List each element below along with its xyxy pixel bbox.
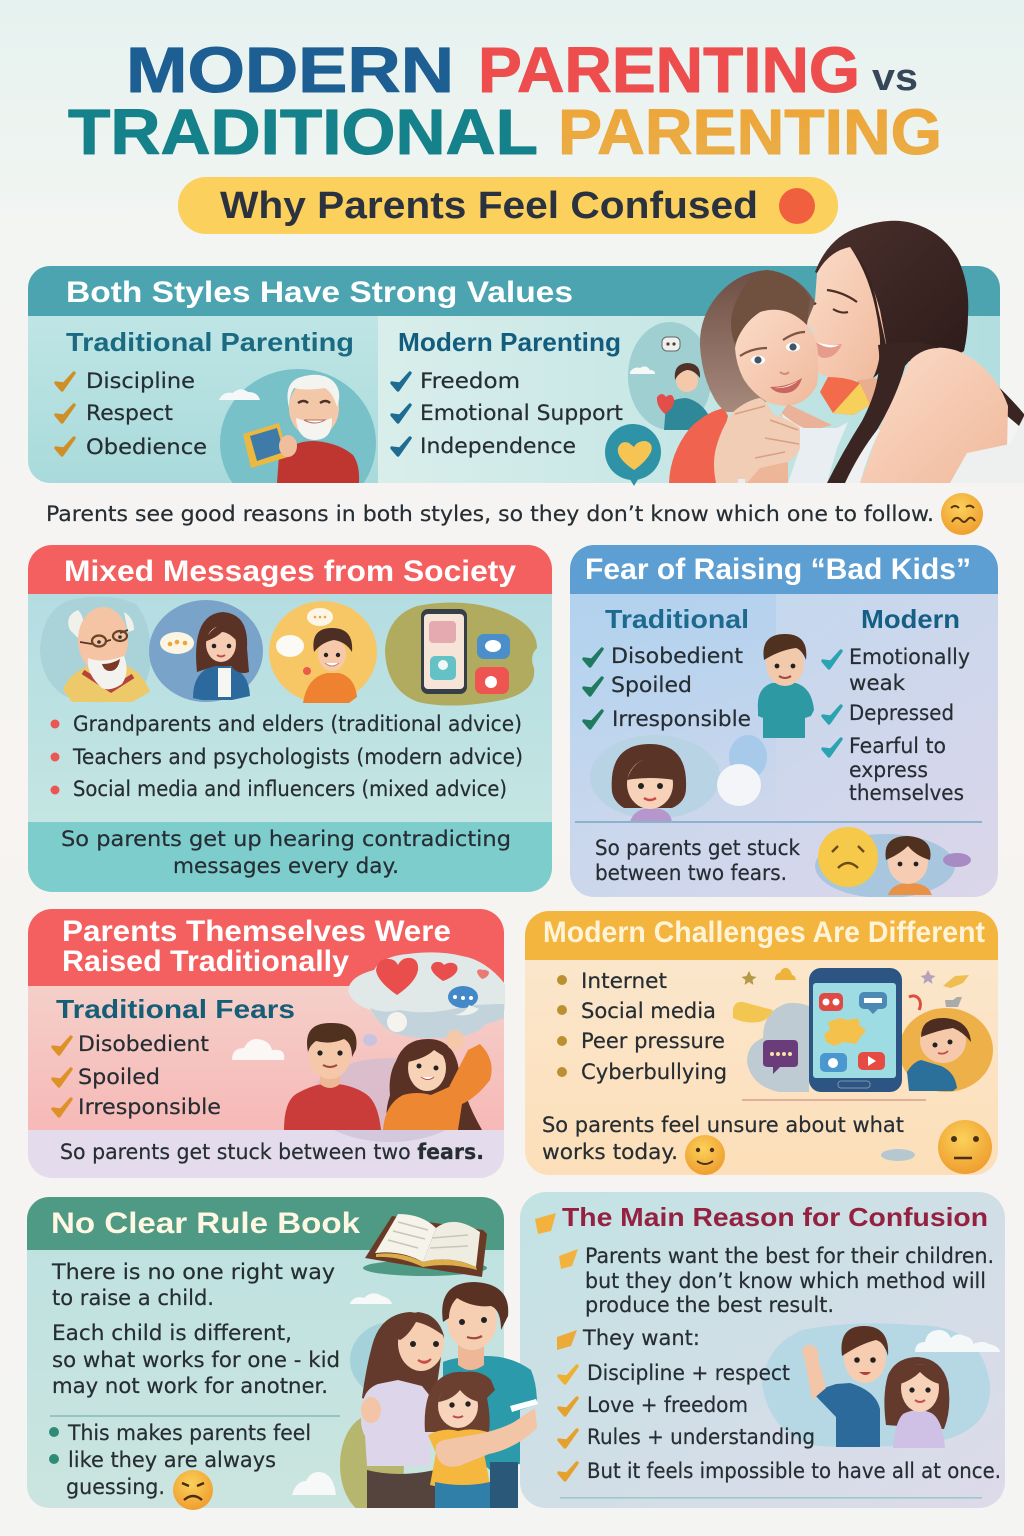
list: traditional values	[56, 369, 207, 459]
icon: psychologist	[269, 601, 377, 703]
panel: fear of raising bad kids	[570, 545, 998, 898]
list: what parents want: But it feels impossible to have all at once.	[587, 1459, 1001, 1483]
list: fears	[53, 1032, 221, 1119]
panel: both styles have strong values	[28, 221, 1024, 526]
list: modern fears: Depressed	[849, 701, 954, 725]
icon: boy and girl	[762, 1323, 1000, 1448]
text: no right way	[51, 1260, 340, 1398]
heading: main reason: The Main Reason for Confusion	[562, 1202, 988, 1232]
list: traditional values: Discipline	[86, 369, 195, 393]
icon: confused emoji	[941, 493, 983, 535]
text: no right way: to raise a child.	[52, 1286, 214, 1310]
icon: young parent with heart	[628, 322, 712, 430]
text: always guessing: like they are always	[68, 1448, 276, 1472]
text: mixed messages conclusion	[61, 827, 511, 878]
text: always guessing: guessing.	[66, 1475, 165, 1499]
panel: modern challenges are different	[525, 911, 998, 1175]
text: always guessing	[49, 1421, 311, 1499]
list: modern fears	[823, 645, 970, 805]
icon: worried girl and speech bubbles	[590, 735, 767, 822]
icon: social media phone	[385, 602, 537, 706]
text: always guessing: This makes parents feel	[67, 1421, 311, 1445]
title: PARENTING	[558, 96, 942, 168]
icon: sad emoji and child	[815, 827, 971, 898]
list: advice sources	[50, 712, 523, 801]
panel: the main reason for confusion	[520, 1192, 1005, 1508]
photo: mother hugging daughter	[669, 221, 1024, 483]
panel: parents raised traditionally	[28, 909, 505, 1178]
list: what parents want: Love + freedom	[587, 1393, 748, 1417]
title: TRADITIONAL	[68, 96, 538, 168]
text: no right way: There is no one right way	[51, 1260, 335, 1284]
text: two fears conclusion: So parents get stuck between two fears.	[60, 1140, 484, 1164]
text: no right way: may not work for anotner.	[52, 1374, 328, 1398]
list: advice sources: Social media and influencers (mixed advice)	[73, 777, 507, 801]
text: they want: They want:	[582, 1326, 700, 1350]
text: intro sentence: Parents see good reasons in both styles, so they don’t know which one to follow.	[46, 502, 934, 526]
text: mixed messages conclusion: So parents get up hearing contradicting	[61, 827, 511, 851]
title: MODERN	[126, 34, 454, 106]
list: what parents want: Discipline + respect	[587, 1361, 790, 1385]
heading: no clear rule book: No Clear Rule Book	[51, 1207, 360, 1240]
list: challenges: Social media	[581, 999, 716, 1023]
heading: modern: Modern	[861, 604, 960, 634]
list: modern fears: weak	[849, 671, 906, 695]
list: modern fears: themselves	[849, 781, 964, 805]
list: modern values: Emotional Support	[420, 401, 623, 425]
text: parents want the best: produce the best result.	[585, 1293, 834, 1317]
list: traditional fears: Spoiled	[611, 673, 692, 697]
text: stuck conclusion: between two fears.	[595, 861, 787, 885]
icon: grandfather with glasses	[40, 597, 151, 702]
heading: fear: Fear of Raising “Bad Kids”	[585, 553, 971, 586]
heading: modern challenges: Modern Challenges Are Different	[543, 916, 985, 949]
icon: grandfather with book	[219, 369, 376, 483]
list: modern values	[392, 369, 623, 458]
divider	[742, 1099, 926, 1101]
icon: heading note	[535, 1213, 556, 1234]
list: challenges: Cyberbullying	[581, 1060, 727, 1084]
heading: parents raised: Raised Traditionally	[62, 945, 349, 978]
heading: mixed messages: Mixed Messages from Society	[64, 555, 516, 588]
list: traditional values: Obedience	[86, 435, 207, 459]
icon: couple	[284, 1023, 492, 1142]
list: challenges	[557, 969, 727, 1084]
title: PARENTING	[478, 34, 860, 106]
list: modern values: Independence	[420, 434, 576, 458]
list: what parents want: Rules + understanding	[587, 1425, 815, 1449]
list: modern fears: Fearful to	[849, 734, 946, 758]
text: no right way: so what works for one - kid	[52, 1348, 340, 1372]
title	[68, 34, 942, 168]
heading: both styles: Both Styles Have Strong Values	[66, 276, 573, 309]
icon: smiling emoji	[685, 1135, 725, 1175]
list: advice sources: Teachers and psychologists (modern advice)	[72, 745, 523, 769]
icon: thought cloud	[348, 952, 505, 1046]
text: unsure conclusion: So parents feel unsure about what	[542, 1113, 904, 1137]
list: fears: Spoiled	[78, 1065, 160, 1089]
list: what parents want	[559, 1361, 1001, 1483]
icon: open book	[363, 1214, 487, 1277]
list: challenges: Peer pressure	[581, 1029, 725, 1053]
icon: smartphone with apps and boy	[733, 968, 993, 1092]
text: no right way: Each child is different,	[52, 1321, 292, 1345]
subtitle pill: Why Parents Feel Confused	[220, 185, 758, 227]
list: traditional fears	[584, 644, 751, 731]
text: parents want the best: but they don’t know which method will	[585, 1269, 986, 1293]
list: fears: Irresponsible	[78, 1095, 221, 1119]
list: traditional fears: Disobedient	[611, 644, 743, 668]
icon: family	[361, 1282, 538, 1508]
panel: mixed messages from society	[28, 545, 552, 892]
icon: standing boy	[758, 634, 814, 738]
heading: parents raised	[62, 915, 451, 978]
heading: modern parenting: Modern Parenting	[398, 327, 621, 357]
list: challenges: Internet	[581, 969, 667, 993]
text: parents want the best: Parents want the best for their children.	[585, 1244, 994, 1268]
text: stuck conclusion: So parents get stuck	[595, 836, 801, 860]
list: fears: Disobedient	[78, 1032, 209, 1056]
list: modern fears: Emotionally	[849, 645, 970, 669]
subtitle pill	[178, 177, 838, 234]
text: mixed messages conclusion: messages every day.	[173, 854, 399, 878]
icon: unsure emoji	[881, 1120, 992, 1174]
text: parents want the best	[559, 1244, 994, 1317]
heading: parents raised: Parents Themselves Were	[62, 915, 451, 948]
text: unsure conclusion: works today.	[542, 1140, 678, 1164]
icon: heart speech bubble	[605, 424, 661, 486]
panel: no clear rule book	[27, 1197, 504, 1515]
list: traditional values: Respect	[86, 401, 173, 425]
text: unsure conclusion	[542, 1113, 904, 1164]
list: modern fears: express	[849, 758, 928, 782]
icon: worried emoji	[173, 1470, 213, 1510]
title: vs	[872, 57, 918, 99]
list: advice sources: Grandparents and elders (traditional advice)	[73, 712, 522, 736]
icon: cloud	[232, 1039, 284, 1060]
text: stuck conclusion	[595, 836, 801, 885]
icon: teacher	[149, 600, 263, 702]
heading: traditional fears: Traditional Fears	[56, 994, 295, 1024]
list: traditional fears: Irresponsible	[612, 707, 751, 731]
heading: traditional parenting: Traditional Parenting	[66, 327, 354, 357]
list: modern values: Freedom	[420, 369, 520, 393]
heading: traditional: Traditional	[605, 604, 749, 634]
